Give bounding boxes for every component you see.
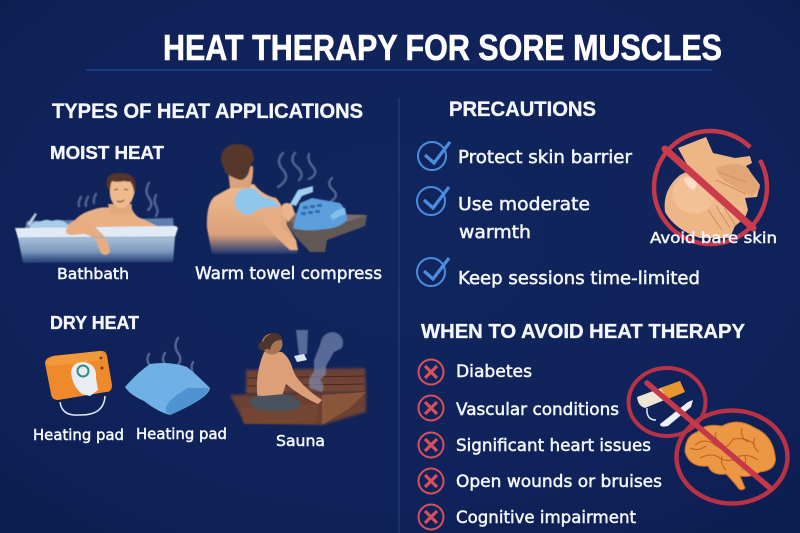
text: open wounds or bruises: Open wounds or bruises (456, 472, 662, 492)
heading: precautions: PRECAUTIONS (449, 98, 596, 121)
text: vascular conditions: Vascular conditions (456, 400, 619, 420)
heading: types of heat applications: TYPES OF HEAT APPLICATIONS (52, 100, 363, 123)
icon: check 2 (417, 187, 449, 215)
icon: man with warm towel compress (207, 144, 367, 254)
label: bathbath: Bathbath (57, 265, 129, 283)
icon: brain with prohibition sign (647, 383, 788, 504)
text: protect skin barrier: Protect skin barrier (458, 148, 633, 168)
prohibition slash through both icons (647, 383, 770, 488)
icon: orange heating pad (45, 351, 112, 415)
text: cognitive impairment: Cognitive impairment (456, 508, 636, 528)
heading: dry heat: DRY HEAT (50, 313, 139, 333)
icon: man in bathtub (15, 173, 178, 263)
text: use moderate warmth: warmth (459, 223, 531, 243)
text: use moderate warmth: Use moderate (458, 195, 590, 215)
icon: sauna (230, 330, 366, 425)
heading: when to avoid heat therapy: WHEN TO AVOID HEAT THERAPY (421, 321, 746, 343)
label: avoid bare skin: Avoid bare skin (650, 229, 777, 247)
icon: x 2 (418, 396, 444, 420)
icon: blue heating pad (125, 338, 210, 415)
icon: x 3 (418, 432, 444, 458)
text: use moderate warmth (458, 195, 590, 243)
icon: check 1 (418, 142, 450, 170)
label: sauna: Sauna (276, 432, 325, 450)
icon: x 4 (418, 468, 444, 494)
text: significant heart issues: Significant heart issues (456, 436, 651, 456)
heading: moist heat: MOIST HEAT (50, 143, 164, 163)
icon: x 5 (418, 504, 444, 530)
text: diabetes: Diabetes (456, 362, 532, 382)
label: heating pad right: Heating pad (136, 425, 227, 443)
label: warm towel compress: Warm towel compress (195, 264, 382, 283)
icon: x 1 (418, 360, 444, 384)
label: heating pad left: Heating pad (33, 426, 124, 444)
icon: device with prohibition sign (628, 368, 706, 436)
icon: check 3 (417, 258, 449, 286)
icon: hands with prohibition sign (654, 131, 767, 244)
text: keep sessions time-limited: Keep sessions time-limited (458, 269, 700, 289)
